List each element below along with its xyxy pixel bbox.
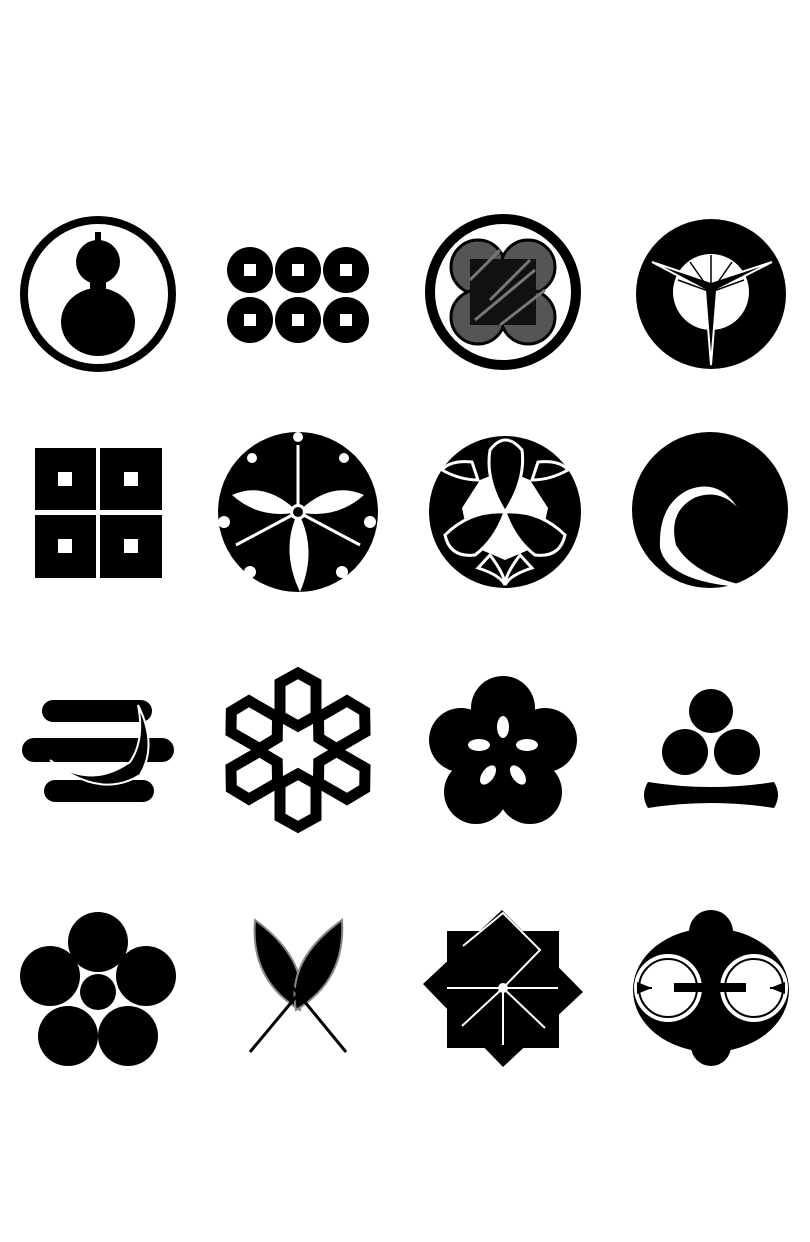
crest: cloud and moon xyxy=(22,700,174,802)
crest: lemon with two rings xyxy=(633,910,789,1066)
crest: clover in ring xyxy=(430,219,576,365)
crest: gourd in ring xyxy=(24,220,172,368)
crest: four squares xyxy=(35,448,162,578)
crest: three balls on stand xyxy=(644,689,778,808)
crest: flower in scalloped circle xyxy=(218,432,378,592)
crest: plum blossom xyxy=(429,676,577,824)
crest: crossed feathers xyxy=(250,920,346,1052)
crest: five circles xyxy=(20,912,176,1066)
crest: hexagon snowflake xyxy=(222,673,374,827)
crest: crane in circle xyxy=(636,219,786,369)
crest: six coins xyxy=(227,247,369,343)
crest: leaves in circle xyxy=(429,436,581,588)
crest: wave swirl xyxy=(632,432,788,588)
crest: pinwheel squares xyxy=(423,910,583,1067)
